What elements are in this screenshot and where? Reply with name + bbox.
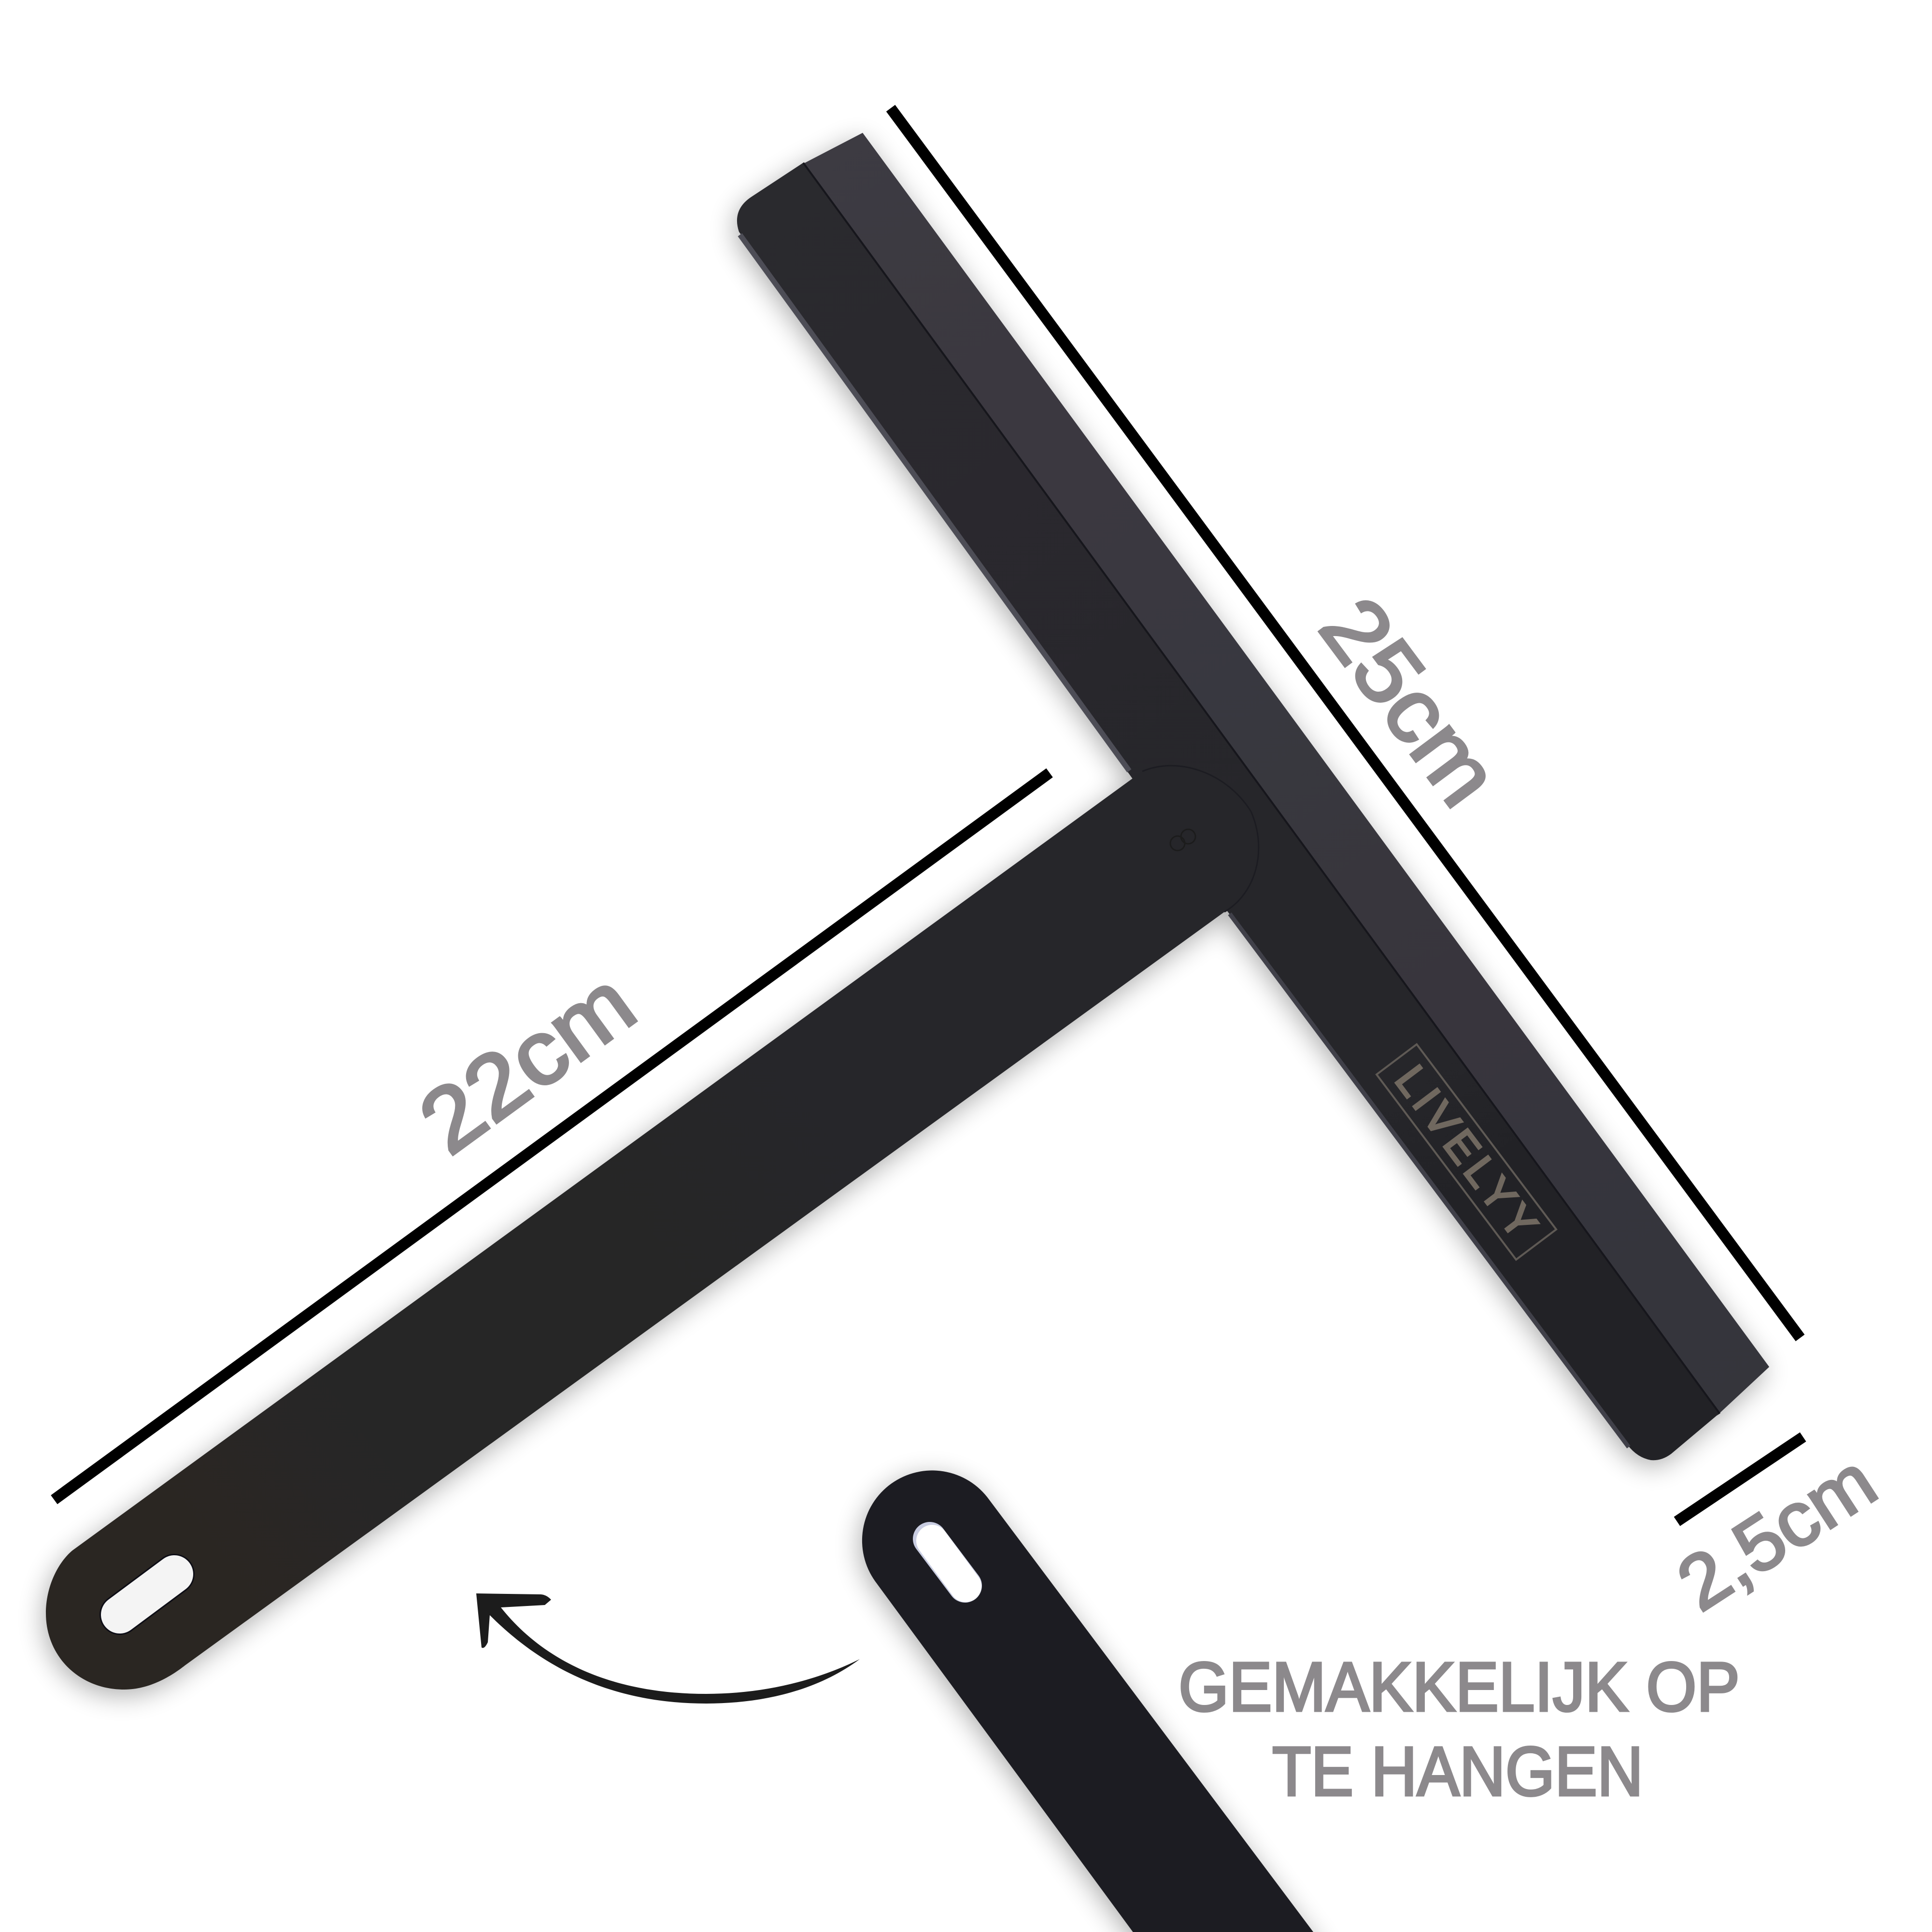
squeegee product photo (46, 133, 1769, 1690)
squeegee blade rubber strip (801, 133, 1769, 1413)
caption: TE HANGEN (1272, 1733, 1643, 1810)
blade seam (803, 163, 1719, 1413)
squeegee handle (46, 766, 1259, 1690)
detail hanging slot (930, 1539, 966, 1586)
blade lower edge highlight (740, 235, 1129, 771)
squeegee blade holder (737, 163, 1720, 1460)
handle joint outline (1142, 766, 1259, 912)
caption (1179, 1648, 1740, 1810)
arrow pointing to hanging slot (476, 1593, 860, 1704)
dimension label: 22cm: 22cm (402, 952, 653, 1173)
detail view of handle end (862, 1470, 1328, 1932)
dimension label: 2,5cm: 2,5cm (1663, 1438, 1890, 1627)
caption: GEMAKKELIJK OP (1179, 1648, 1740, 1726)
dimension line: 2,5cm (1677, 1437, 1803, 1521)
handle hanging slot (120, 1574, 174, 1615)
dimension line: 22cm (54, 773, 1050, 1500)
dimension label: 25cm: 25cm (1301, 580, 1519, 824)
dimension line: 25cm (891, 108, 1800, 1338)
moulded mark on joint (1170, 829, 1195, 851)
logo plate: LIVELYY (1386, 1057, 1547, 1248)
blade lower edge highlight right (1230, 914, 1629, 1447)
